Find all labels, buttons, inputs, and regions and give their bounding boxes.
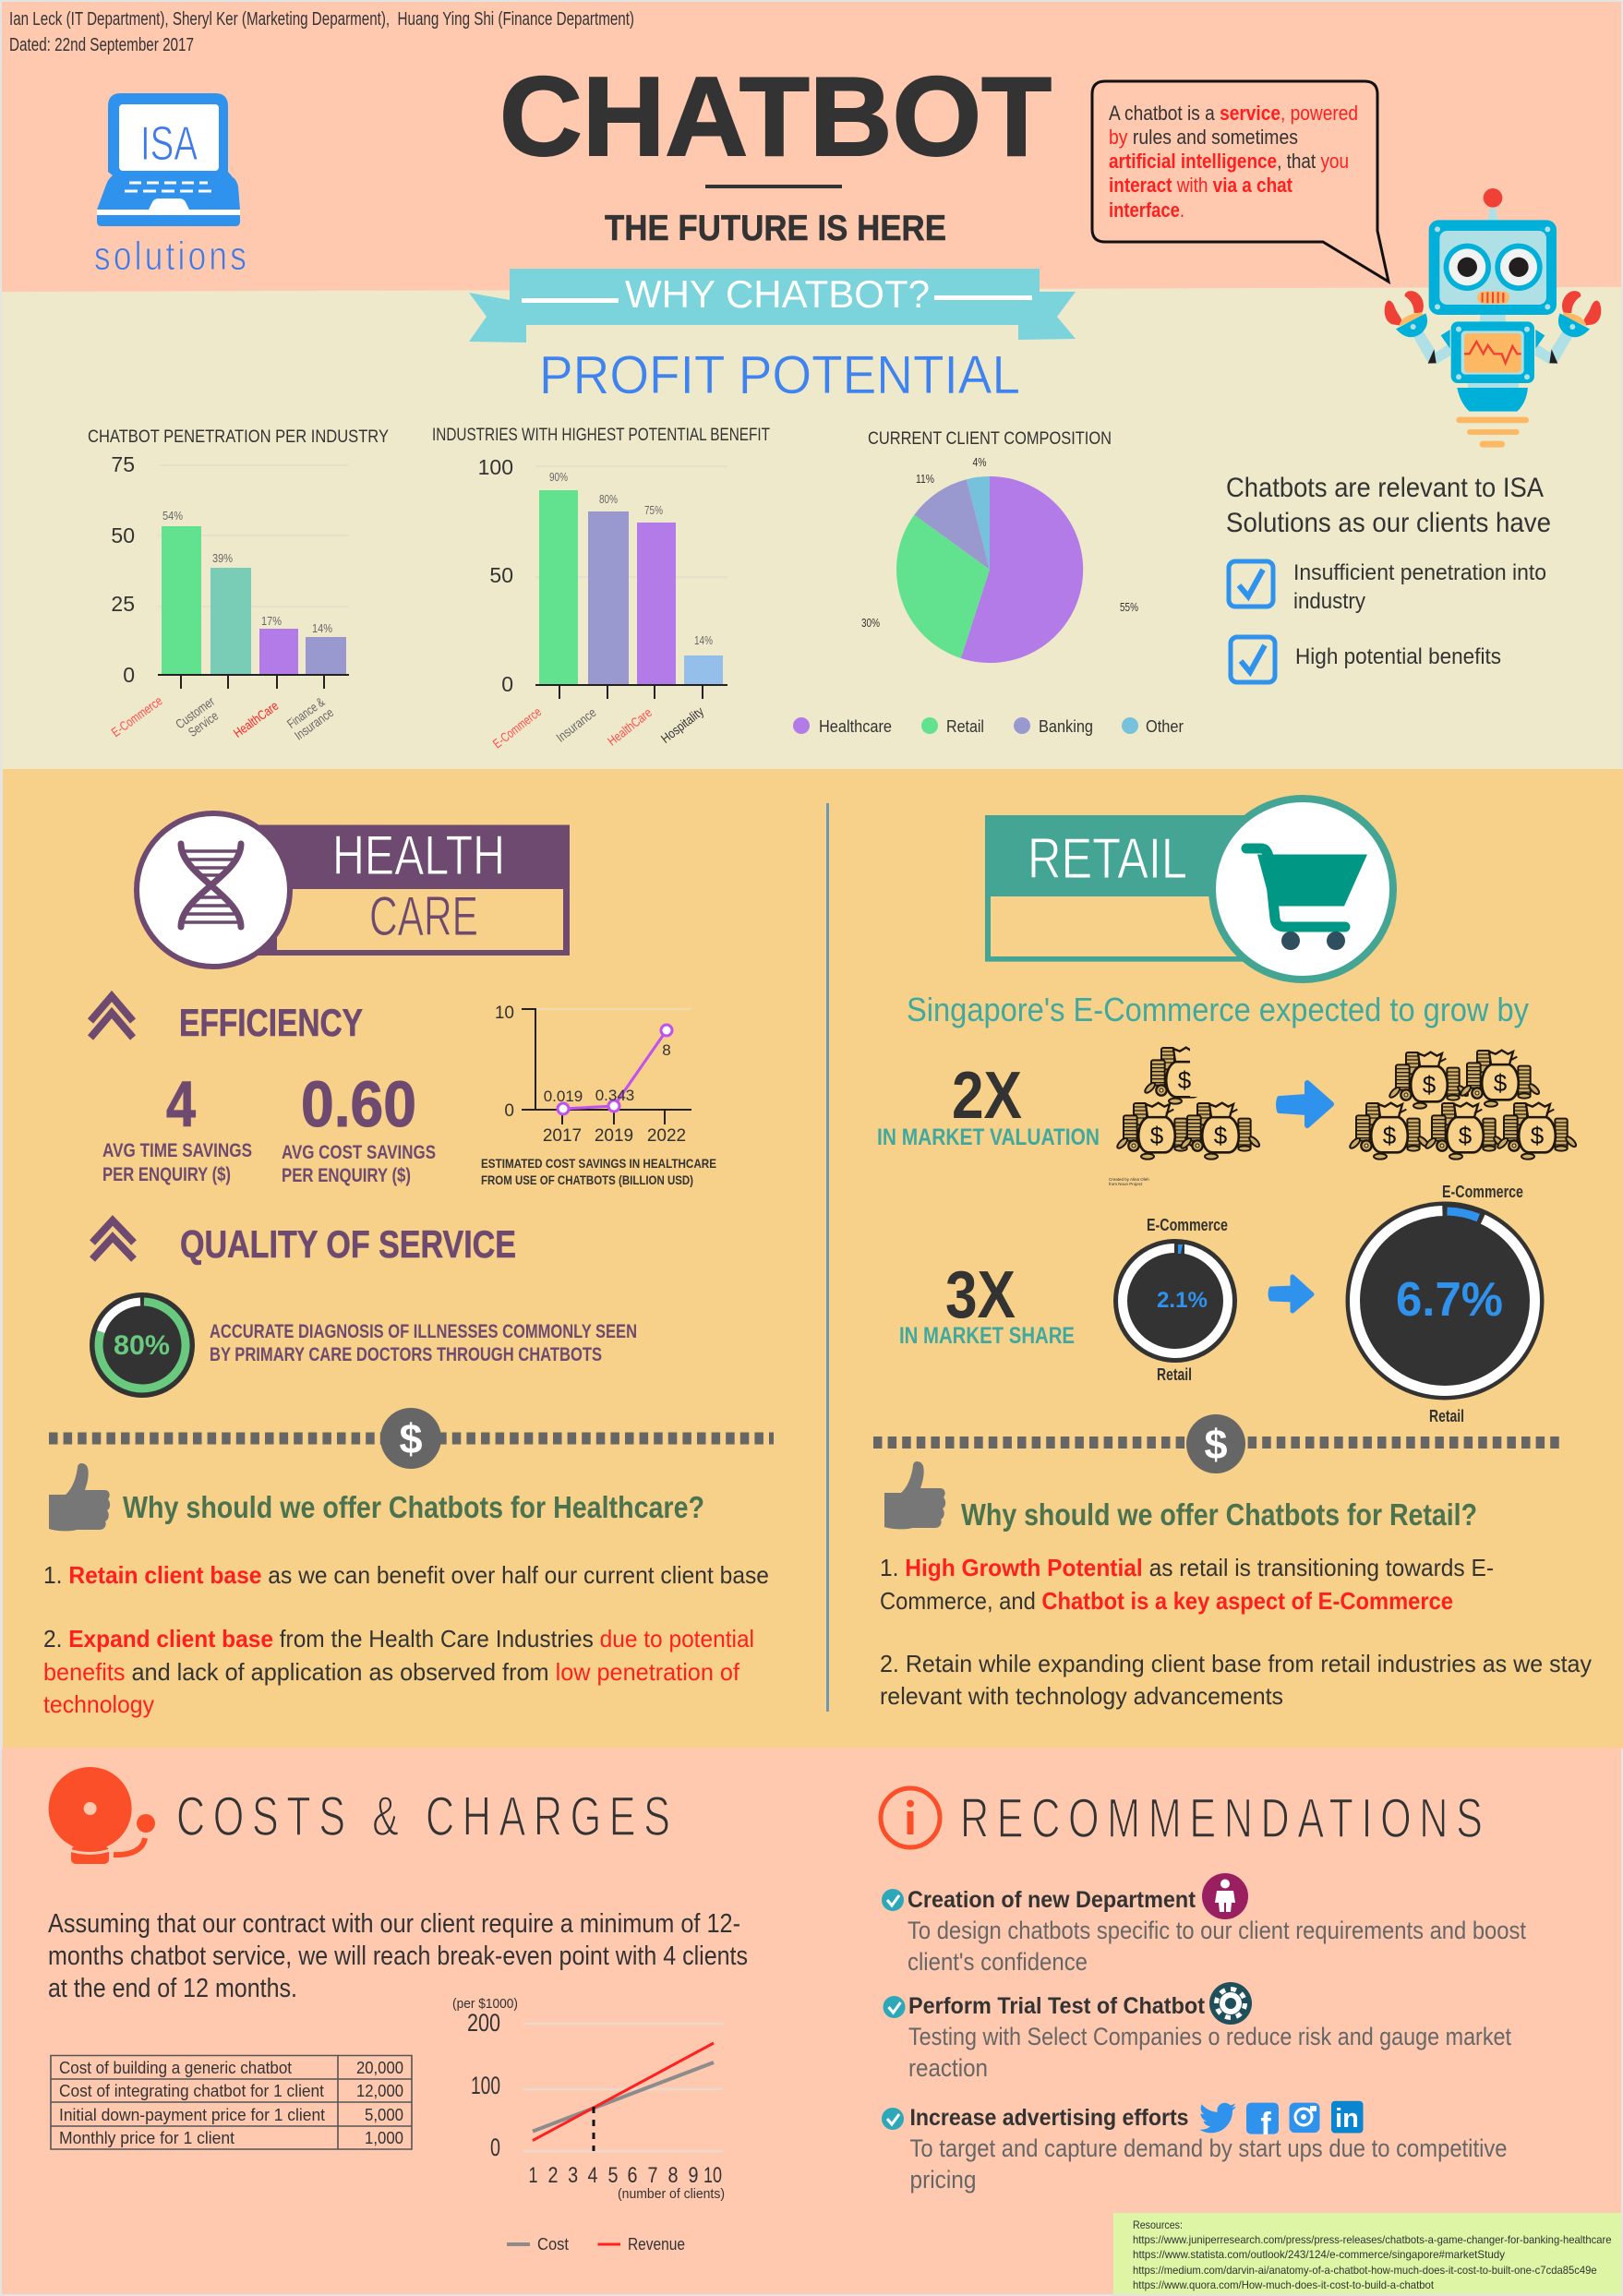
chart: cost versus revenue line: 100 [471,2072,500,2099]
chart: chatbot penetration per industry: 17% [261,614,282,628]
section: quality of service: BY PRIMARY CARE DOCTORS THROUGH CHATBOTS [210,1344,602,1365]
text block: relevance to ISA with checkboxes: High potential benefits [1295,644,1501,669]
chart: chatbot penetration per industry: HealthCare [231,698,282,740]
chart: estimated cost savings in healthcare line: 0 [504,1101,514,1121]
panel: retail header: RETAIL [1028,827,1187,891]
chart: 6.7% donut [1346,1183,1544,1425]
chart: cost versus revenue line: (number of clients) [618,2186,725,2202]
callout: chatbot definition speech bubble: interact with via a chat [1109,174,1293,197]
icon: linkedin [1331,2101,1363,2134]
icon: person [1202,1873,1248,1919]
section: efficiency: PER ENQUIRY ($) [282,1165,411,1186]
panel: header background [2,2,1621,294]
text block: why offer chatbots for retail: 1. High Growth Potential as retail is transitioning towards E- [880,1554,1494,1581]
panel: profit potential background [2,287,1621,770]
chart: chatbot penetration per industry: CHATBOT PENETRATION PER INDUSTRY [88,427,389,447]
chart: industries with highest potential benefit: Hospitality [658,703,706,746]
chart: cost versus revenue line: Cost [537,2235,569,2254]
chart: cost versus revenue line: 4 [587,2163,598,2188]
table: cost items [51,2055,412,2149]
icon: instagram [1289,2103,1320,2133]
text block: why offer chatbots for healthcare [43,1490,769,1718]
stat: 3X market share: IN MARKET SHARE [899,1323,1075,1349]
icon: 80% gauge: 80% [114,1330,170,1361]
text block: why offer chatbots for healthcare: 1. Retain client base as we can benefit over half our current client base [43,1561,769,1589]
chart: current client composition pie [793,429,1184,736]
authors and date [9,9,634,55]
divider: dollar retail [873,1414,1560,1473]
chart: cost versus revenue line: 5 [607,2163,619,2188]
chart: estimated cost savings in healthcare line: FROM USE OF CHATBOTS (BILLION USD) [481,1172,693,1187]
arrow: market share growth [1270,1277,1312,1311]
table: cost items: Cost of building a generic chatbot [59,2059,292,2077]
recommendation: increase advertising: Increase advertising efforts [910,2105,1189,2131]
table: cost items: 20,000 [356,2059,403,2077]
logo: ISA solutions laptop: ISA [140,117,198,171]
authors and date: Dated: 22nd September 2017 [9,35,194,55]
icon: 80% gauge [90,1292,195,1398]
chart: cost versus revenue line: 8 [668,2163,678,2188]
chart: chatbot penetration per industry: 54% [162,509,183,523]
banner: why chatbot [469,269,1076,343]
recommendation: increase advertising [882,2101,1507,2194]
chart: industries with highest potential benefit: 80% [599,492,618,506]
chart: estimated cost savings in healthcare line: 0.019 [544,1088,583,1105]
chart: estimated cost savings in healthcare line: 0.343 [595,1087,634,1104]
icon: money bags five: $ [1383,1122,1397,1149]
chart: estimated cost savings in healthcare line: ESTIMATED COST SAVINGS IN HEALTHCARE [481,1156,716,1171]
table: cost items: Initial down-payment price for 1 client [59,2106,325,2124]
chart: industries with highest potential benefit: Insurance [553,704,599,745]
section: efficiency: 0.60 [301,1068,416,1140]
chart: cost versus revenue line: 10 [703,2163,722,2188]
chart: cost versus revenue line: 1 [528,2163,537,2188]
table: cost items: Monthly price for 1 client [59,2129,234,2147]
text block: why offer chatbots for retail: relevant with technology advancements [880,1682,1283,1710]
chart: cost versus revenue line: 7 [648,2163,657,2188]
icon: twitter [1199,2103,1236,2133]
text block: why offer chatbots for retail: Commerce, and Chatbot is a key aspect of E-Commerce [880,1587,1453,1615]
chart: industries with highest potential benefit: 14% [694,633,713,647]
chart: estimated cost savings in healthcare line [481,1004,716,1187]
chart: industries with highest potential benefit: INDUSTRIES WITH HIGHEST POTENTIAL BENEFIT [432,426,770,445]
chart: chatbot penetration per industry: 50 [111,523,135,547]
table: cost items: 5,000 [365,2106,403,2124]
panel: costs and recommendations background [2,1748,1621,2294]
heading: profit potential: PROFIT POTENTIAL [539,345,1020,405]
chart: chatbot penetration per industry: Service [186,708,221,739]
chart: cost versus revenue line [452,1996,725,2254]
icon: DNA helix [181,844,241,927]
chart: chatbot penetration per industry: E-Commerce [108,693,165,739]
stat: 2X market valuation: 2X [952,1059,1022,1133]
icon: info circle [881,1788,940,1847]
text block: break-even assumption [48,1909,748,2003]
icon: money bags two and a half: $ [1214,1122,1228,1149]
divider: dollar healthcare: $ [399,1415,423,1462]
section: efficiency: PER ENQUIRY ($) [102,1164,231,1185]
chart: industries with highest potential benefit: 50 [489,563,513,587]
section: quality of service [90,1220,637,1398]
panel: resources: https://medium.com/darvin-ai/anatomy-of-a-chatbot-how-much-does-it-cost-to-built-one-c7cda85c49e [1133,2264,1597,2277]
chart: current client composition pie: Banking [1039,717,1093,736]
chart: chatbot penetration per industry [88,427,389,743]
chart: industries with highest potential benefit: 100 [478,455,513,479]
icon: money bags five: $ [1494,1069,1508,1097]
panel: retail header [985,799,1393,980]
icon: money bags two and a half [1109,1039,1261,1186]
panel: health care header: CARE [369,885,478,947]
chart: current client composition pie: 55% [1120,600,1138,614]
icon: money bags two and a half: from Noun Project [1109,1182,1143,1186]
callout: chatbot definition speech bubble: interface. [1109,198,1184,222]
recommendation: creation of new department [882,1873,1526,1976]
chart: cost versus revenue line: 200 [467,2009,500,2037]
chart: chatbot penetration per industry: 75 [111,452,135,476]
chart: chatbot penetration per industry: 0 [123,663,135,687]
callout: chatbot definition speech bubble: A chatbot is a service, powered [1109,102,1358,125]
chart: industries with highest potential benefit: HealthCare [605,704,655,749]
stat: 3X market share [899,1258,1075,1349]
recommendation: increase advertising: To target and capture demand by start ups due to competitive [910,2134,1507,2162]
chart: estimated cost savings in healthcare line: 2017 [543,1126,582,1146]
chart: 2.1% donut [1113,1216,1237,1384]
chart: cost versus revenue line: 3 [568,2163,578,2188]
chart: current client composition pie: Retail [946,717,984,736]
icon: facebook: f [1260,2107,1271,2142]
chart: cost versus revenue line: 2 [548,2163,558,2188]
panel: resources: https://www.statista.com/outlook/243/124/e-commerce/singapore#marketStudy [1133,2248,1505,2261]
panel: health care header [137,813,570,967]
heading: e-commerce growth: Singapore's E-Commerce expected to grow by [907,991,1529,1028]
divider: dollar healthcare [49,1408,774,1469]
panel: resources: https://www.quora.com/How-much-does-it-cost-to-build-a-chatbot [1133,2278,1435,2291]
chart: estimated cost savings in healthcare line: 10 [495,1004,514,1023]
recommendation: perform trial test: Perform Trial Test of Chatbot [908,1993,1206,2019]
section: efficiency: EFFICIENCY [179,1001,363,1044]
chart: chatbot penetration per industry: 14% [312,621,332,635]
text block: why offer chatbots for healthcare: benefits and lack of application as observed from low penetration of [43,1658,740,1686]
chart: cost versus revenue line: Revenue [628,2235,685,2254]
authors and date: Ian Leck (IT Department), Sheryl Ker (Marketing Deparment), Huang Ying Shi (Finance Department) [9,9,634,30]
chart: 2.1% donut: 2.1% [1157,1288,1208,1313]
chart: industries with highest potential benefit [432,426,770,751]
chart: estimated cost savings in healthcare line: 2022 [647,1126,686,1146]
panel: resources: Resources: [1133,2218,1183,2231]
chart: industries with highest potential benefit: E-Commerce [490,704,544,751]
panel: health care header: HEALTH [332,824,505,886]
stat: 2X market valuation [877,1059,1100,1150]
icon: money bags two and a half: Created by Alina Oleh [1109,1177,1149,1182]
chart: 6.7% donut: Retail [1429,1407,1464,1425]
icon: alarm bell [49,1767,155,1864]
heading: recommendations: RECOMMENDATIONS [960,1788,1483,1850]
chart: chatbot penetration per industry: 25 [111,592,135,616]
chart: chatbot penetration per industry: 39% [212,551,233,565]
chart: cost versus revenue line: 6 [628,2163,637,2188]
icon: thumbs up retail [884,1461,945,1529]
icon: gear [1209,1982,1252,2025]
table: cost items: Cost of integrating chatbot for 1 client [59,2082,324,2100]
section: quality of service: QUALITY OF SERVICE [180,1222,516,1266]
text block: why offer chatbots for healthcare: technology [43,1690,154,1718]
table: cost items: 12,000 [356,2082,403,2100]
icon: money bags two and a half: $ [1150,1122,1164,1149]
text block: break-even assumption: at the end of 12 months. [48,1974,297,2003]
text block: relevance to ISA with checkboxes: Insufficient penetration into [1293,560,1546,585]
callout: chatbot definition speech bubble: by rules and sometimes [1109,126,1298,149]
text block: relevance to ISA with checkboxes [1226,473,1551,682]
recommendation: creation of new department: To design chatbots specific to our client requirements and boost [908,1917,1526,1944]
text block: relevance to ISA with checkboxes: Solutions as our clients have [1226,508,1551,538]
text block: why offer chatbots for healthcare: Why should we offer Chatbots for Healthcare? [123,1490,704,1524]
icon: shopping cart [1246,848,1367,950]
recommendation: perform trial test [883,1982,1511,2082]
icon: money bags five [1349,1051,1578,1160]
chart: current client composition pie: 11% [916,472,934,486]
chart: industries with highest potential benefit: 75% [644,503,663,517]
heading: costs and charges: COSTS & CHARGES [176,1786,670,1848]
chart: cost versus revenue line: 9 [689,2163,698,2188]
stat: 3X market share: 3X [945,1258,1016,1332]
chart: chatbot penetration per industry: Insurance [292,704,336,743]
icon: robot mascot [1385,188,1601,448]
text block: why offer chatbots for retail: 2. Retain while expanding client base from retail industries as we stay [880,1650,1592,1677]
icon: thumbs up healthcare [49,1463,110,1531]
title: CHATBOT: CHATBOT [499,54,1052,179]
icon: money bags five: $ [1459,1122,1473,1149]
panel: resources [1113,2213,1621,2294]
chart: current client composition pie: Healthcare [819,717,892,736]
text block: break-even assumption: months chatbot service, we will reach break-even point with 4 clients [48,1941,748,1971]
table: cost items: 1,000 [365,2129,403,2147]
recommendation: increase advertising: pricing [910,2166,977,2194]
chart: current client composition pie: 30% [861,616,880,630]
icon: money bags five: $ [1531,1122,1545,1149]
section: efficiency: 4 [166,1068,196,1140]
text block: why offer chatbots for retail [880,1497,1592,1710]
recommendation: perform trial test: reaction [908,2054,988,2082]
chart: industries with highest potential benefit: 0 [501,672,513,696]
chart: current client composition pie: 4% [973,455,987,469]
callout: chatbot definition speech bubble [1092,81,1389,282]
section: quality of service: ACCURATE DIAGNOSIS OF ILLNESSES COMMONLY SEEN [210,1321,637,1342]
chart: 6.7% donut: E-Commerce [1442,1183,1523,1201]
arrow: valuation growth [1279,1083,1331,1125]
chart: chatbot penetration per industry: Customer [173,693,217,731]
icon: linkedin: in [1335,2104,1359,2134]
recommendation: perform trial test: Testing with Select Companies o reduce risk and gauge market [908,2023,1511,2050]
chart: cost versus revenue line: 0 [490,2134,500,2161]
logo: ISA solutions laptop [94,93,246,279]
icon: facebook [1246,2103,1279,2142]
icon: money bags five: $ [1423,1071,1437,1099]
panel: health care and retail background [3,769,1623,1749]
callout: chatbot definition speech bubble: artificial intelligence, that you [1109,150,1349,173]
chart: estimated cost savings in healthcare line: 8 [662,1041,671,1059]
chart: current client composition pie: Other [1146,717,1184,736]
chart: 2.1% donut: E-Commerce [1147,1216,1228,1234]
section: efficiency: AVG COST SAVINGS [282,1142,436,1163]
chart: 2.1% donut: Retail [1157,1365,1192,1384]
text block: relevance to ISA with checkboxes: industry [1293,589,1365,614]
banner: why chatbot: WHY CHATBOT? [625,272,930,316]
divider: dollar retail: $ [1204,1421,1228,1468]
chart: 6.7% donut: 6.7% [1396,1273,1503,1327]
text block: why offer chatbots for healthcare: 2. Expand client base from the Health Care Industries due to potential [43,1625,754,1653]
subtitle: the future is here [605,185,946,248]
text block: why offer chatbots for retail: Why should we offer Chatbots for Retail? [961,1497,1477,1532]
logo: ISA solutions laptop: solutions [94,234,246,279]
chart: industries with highest potential benefit: 90% [549,470,568,484]
chart: current client composition pie: CURRENT CLIENT COMPOSITION [868,429,1112,449]
chart: estimated cost savings in healthcare line: 2019 [595,1126,633,1146]
text block: relevance to ISA with checkboxes: Chatbots are relevant to ISA [1226,473,1544,503]
icon: money bags two and a half: $ [1178,1066,1192,1094]
chart: chatbot penetration per industry: Finance & [284,694,328,731]
chart: cost versus revenue line: (per $1000) [452,1996,518,2012]
subtitle: the future is here: THE FUTURE IS HERE [605,209,946,248]
section: efficiency [90,996,436,1186]
recommendation: creation of new department: Creation of new Department [908,1887,1196,1913]
recommendation: creation of new department: client's confidence [908,1948,1088,1976]
stat: 2X market valuation: IN MARKET VALUATION [877,1124,1100,1150]
text block: break-even assumption: Assuming that our contract with our client require a minimum of 12- [48,1909,740,1939]
section: efficiency: AVG TIME SAVINGS [102,1140,252,1161]
